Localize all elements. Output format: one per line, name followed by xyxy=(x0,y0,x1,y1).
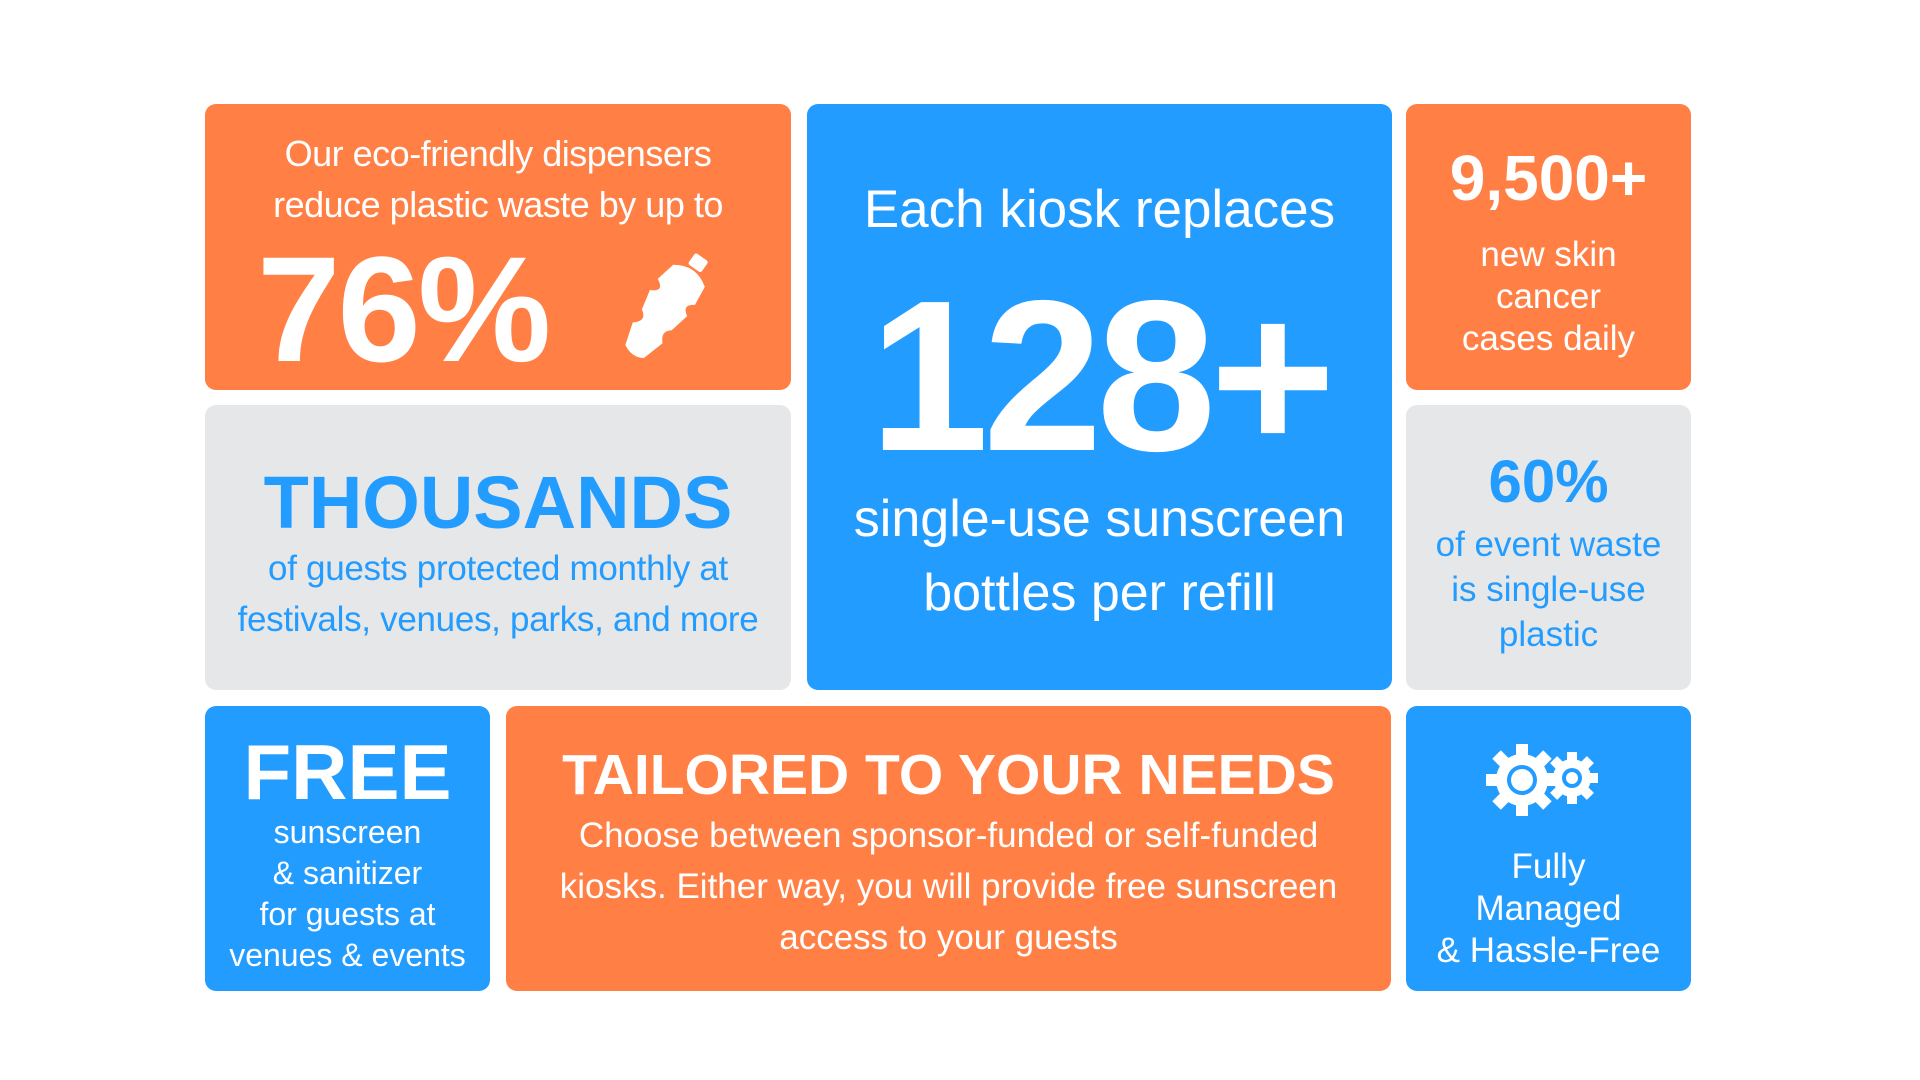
heading: FREE: FREE xyxy=(243,728,452,816)
text: free details: venues & events xyxy=(229,937,466,973)
text: fully managed: Fully xyxy=(1512,847,1585,886)
text: fully managed xyxy=(1437,847,1660,970)
icon: gears xyxy=(1486,744,1598,816)
panel: 9,500+ skin cancer xyxy=(1406,104,1691,390)
number: 128+: 128+ xyxy=(869,255,1330,496)
panel: thousands of guests xyxy=(205,405,791,690)
text: guests protected: of guests protected monthly at xyxy=(268,549,728,588)
text: event waste: of event waste xyxy=(1436,525,1661,564)
panel: 60% event waste xyxy=(1406,405,1691,690)
text: event waste: plastic xyxy=(1499,615,1598,654)
text: each kiosk replaces: Each kiosk replaces xyxy=(864,180,1335,239)
text: event waste: is single-use xyxy=(1451,570,1646,609)
heading: THOUSANDS: THOUSANDS xyxy=(264,461,732,544)
number: 76%: 76% xyxy=(257,225,548,393)
icon: crushed bottle xyxy=(625,254,708,358)
panel: 128+ bottles xyxy=(807,104,1392,690)
text: skin cancer cases: cases daily xyxy=(1462,319,1635,358)
panel: 76% plastic reduction xyxy=(205,104,791,390)
text: skin cancer cases: new skin xyxy=(1480,235,1617,274)
text: single-use bottles: single-use sunscreen xyxy=(854,490,1345,548)
panel: tailored xyxy=(506,706,1391,991)
number: 9,500+: 9,500+ xyxy=(1450,142,1647,214)
text: single-use bottles xyxy=(854,490,1345,622)
text: free details: for guests at xyxy=(259,896,436,932)
text: free details xyxy=(229,814,466,973)
panel: fully managed xyxy=(1406,706,1691,991)
text: guests protected: festivals, venues, parks, and more xyxy=(238,600,758,639)
text: tailored details: access to your guests xyxy=(779,918,1118,957)
text: free details: sunscreen xyxy=(274,814,421,850)
text: skin cancer cases: cancer xyxy=(1496,277,1601,316)
text: intro xyxy=(273,133,723,225)
text: guests protected xyxy=(238,549,758,639)
text: skin cancer cases xyxy=(1462,235,1635,358)
text: intro: Our eco-friendly dispensers xyxy=(285,133,711,174)
text: event waste xyxy=(1436,525,1661,654)
text: single-use bottles: bottles per refill xyxy=(923,564,1276,622)
text: fully managed: Managed xyxy=(1476,889,1621,928)
text: tailored details xyxy=(560,816,1337,957)
text: free details: & sanitizer xyxy=(273,855,422,891)
heading: tailored to your needs: TAILORED TO YOUR NEEDS xyxy=(562,743,1335,807)
text: intro: reduce plastic waste by up to xyxy=(273,184,723,225)
text: tailored details: kiosks. Either way, you will provide free sunscreen xyxy=(560,867,1337,906)
panel: FREE sunscreen xyxy=(205,706,490,991)
number: 60%: 60% xyxy=(1488,448,1609,515)
text: fully managed: & Hassle-Free xyxy=(1437,931,1660,970)
text: tailored details: Choose between sponsor-funded or self-funded xyxy=(579,816,1318,855)
